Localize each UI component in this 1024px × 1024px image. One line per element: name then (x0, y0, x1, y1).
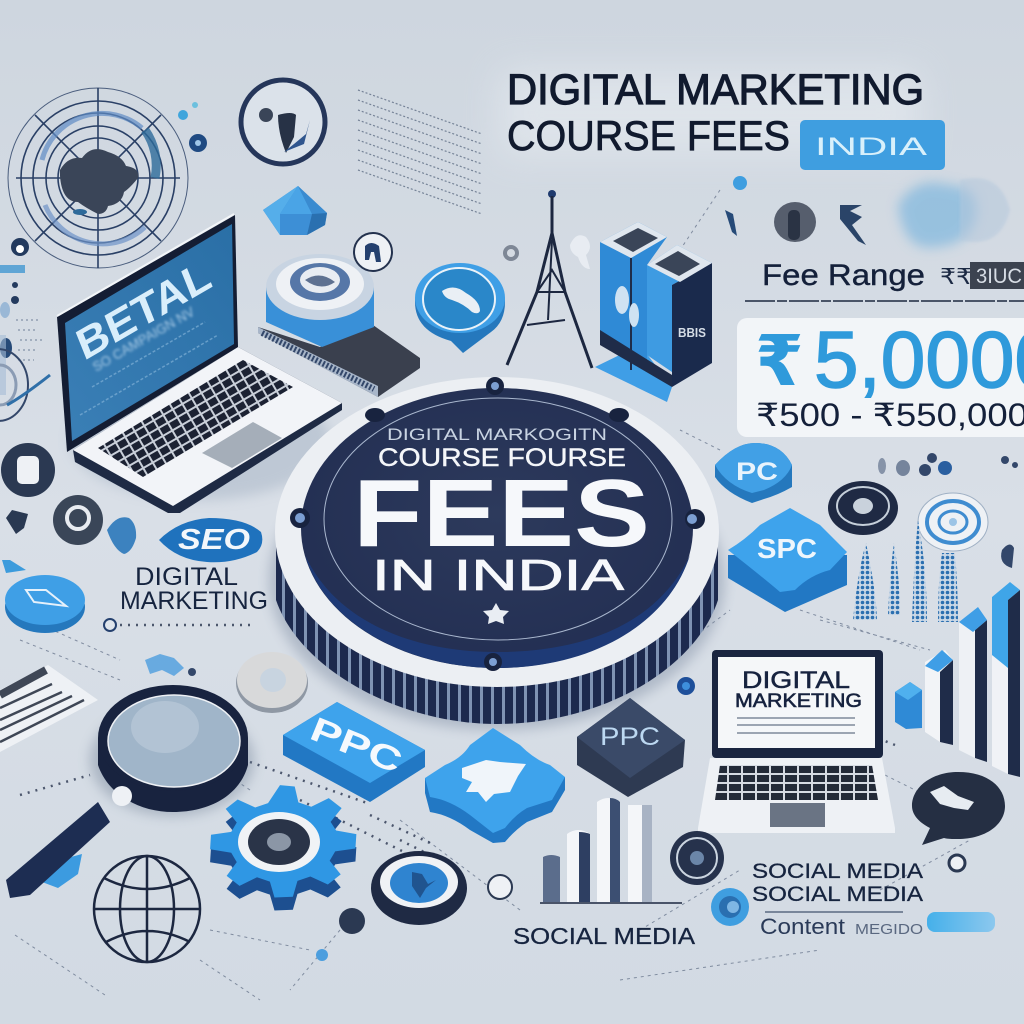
tile: PPC dark hex: PPC (600, 723, 660, 751)
fee amount: ₹ (755, 322, 804, 400)
laptop base (73, 347, 342, 513)
disc heading in india: IN INDIA (372, 551, 625, 600)
icon: grey dial (236, 652, 308, 713)
label: content: MEGIDO (855, 921, 923, 938)
laptop right base (698, 758, 895, 833)
icon: server blocks: BBIS (678, 325, 706, 340)
icon: document (0, 665, 98, 752)
icon: spiral target (918, 493, 988, 551)
laptop right lid (712, 650, 883, 758)
icon: antenna tower (507, 190, 592, 368)
label: digital marketing left: MARKETING (120, 587, 268, 615)
fee range values: ₹500 - ₹550,000 (756, 397, 1024, 433)
icon: PPC round blue (715, 443, 792, 503)
tile: PPC blue: PPC (305, 710, 407, 781)
tile: blue puzzle (425, 728, 565, 843)
icon: dark record badge (371, 851, 467, 925)
laptop screen subtitle: SO CAMPAIGN NV (90, 303, 198, 375)
badge: India (800, 120, 945, 170)
icon: small grey token (503, 245, 519, 261)
icon: blue dot (677, 677, 695, 695)
fee panel (737, 315, 1024, 437)
laptop right: MARKETING (735, 691, 862, 712)
disc dark face (301, 388, 693, 668)
badge: SEO: SEO (178, 524, 251, 556)
icon: dark round chip (670, 831, 724, 885)
laptop right (698, 650, 895, 833)
disc heading fees: FEES (353, 460, 650, 567)
icon: speech bubble (912, 772, 1005, 845)
icon: magnifier (6, 685, 254, 898)
icons row under title (725, 176, 1010, 248)
laptop left (57, 214, 342, 513)
left small dark icons (1, 443, 136, 573)
chart: 3D bars right (895, 582, 1020, 777)
icon: globe badge (241, 80, 325, 164)
icon: blue oval (5, 575, 85, 633)
fee range label: 3IUC (976, 265, 1022, 288)
icon: small dots right (878, 453, 1018, 568)
laptop right: DIGITAL (742, 667, 850, 694)
icon: dark target (828, 481, 898, 535)
icon: blue round button (415, 263, 505, 353)
icon: small nodes (316, 875, 512, 961)
title line 1: DIGITAL MARKETING (507, 66, 924, 114)
laptop screen lines (80, 322, 218, 415)
label: content: Content (760, 914, 845, 939)
icon: radar target (8, 88, 188, 268)
icon: small ring (104, 619, 116, 631)
disc star (483, 603, 509, 624)
icon: blue gem (263, 186, 327, 235)
label: social media right: SOCIAL MEDIA (752, 883, 923, 906)
central disc (269, 377, 725, 730)
icon: small chat dot (354, 233, 392, 271)
left edge: scribbled column and icons (0, 265, 50, 421)
title line 2: COURSE FEES (507, 112, 790, 159)
label: social media center: SOCIAL MEDIA (513, 923, 696, 949)
disc white ring (275, 377, 719, 687)
tile: SPC diamond (728, 508, 847, 612)
laptop screen title: BETAL (70, 251, 217, 369)
icon: blue cylinder on book (258, 254, 420, 397)
laptop trackpad (202, 422, 282, 468)
badge: SEO (159, 518, 262, 562)
label: social media right: SOCIAL MEDIA (752, 860, 923, 883)
disc bolts (290, 377, 705, 671)
fee range label (745, 259, 1024, 301)
label: content (760, 912, 995, 939)
chart: 3D bars center (540, 798, 682, 903)
icon: blue gear (210, 785, 356, 910)
icon: blue splash (145, 654, 196, 676)
icon: wireframe globe (94, 856, 200, 962)
tile: SPC diamond: SPC (757, 533, 817, 564)
icon: small dots near radar (11, 102, 207, 256)
laptop keyboard (98, 360, 293, 477)
fee range label: Fee Range (762, 259, 925, 292)
label: social media right (752, 855, 965, 906)
disc heading course: COURSE FOURSE (378, 444, 626, 472)
disc heading small: DIGITAL MARKOGITN (387, 425, 607, 444)
tile: PPC blue (283, 702, 425, 802)
title (507, 66, 924, 159)
fee range label: ₹₹ (940, 264, 972, 289)
label: digital marketing left (120, 563, 268, 615)
icon: blue round chip (711, 888, 749, 926)
disc ribbed side (276, 535, 718, 724)
tile: PPC dark hex (577, 698, 685, 797)
laptop lid (57, 215, 238, 452)
icon: server blocks (595, 222, 712, 402)
chart: dotted spikes (853, 520, 958, 622)
label: digital marketing left: DIGITAL (135, 563, 238, 591)
badge: India: INDIA (815, 133, 928, 161)
icon: PPC round blue: PC (736, 458, 778, 486)
